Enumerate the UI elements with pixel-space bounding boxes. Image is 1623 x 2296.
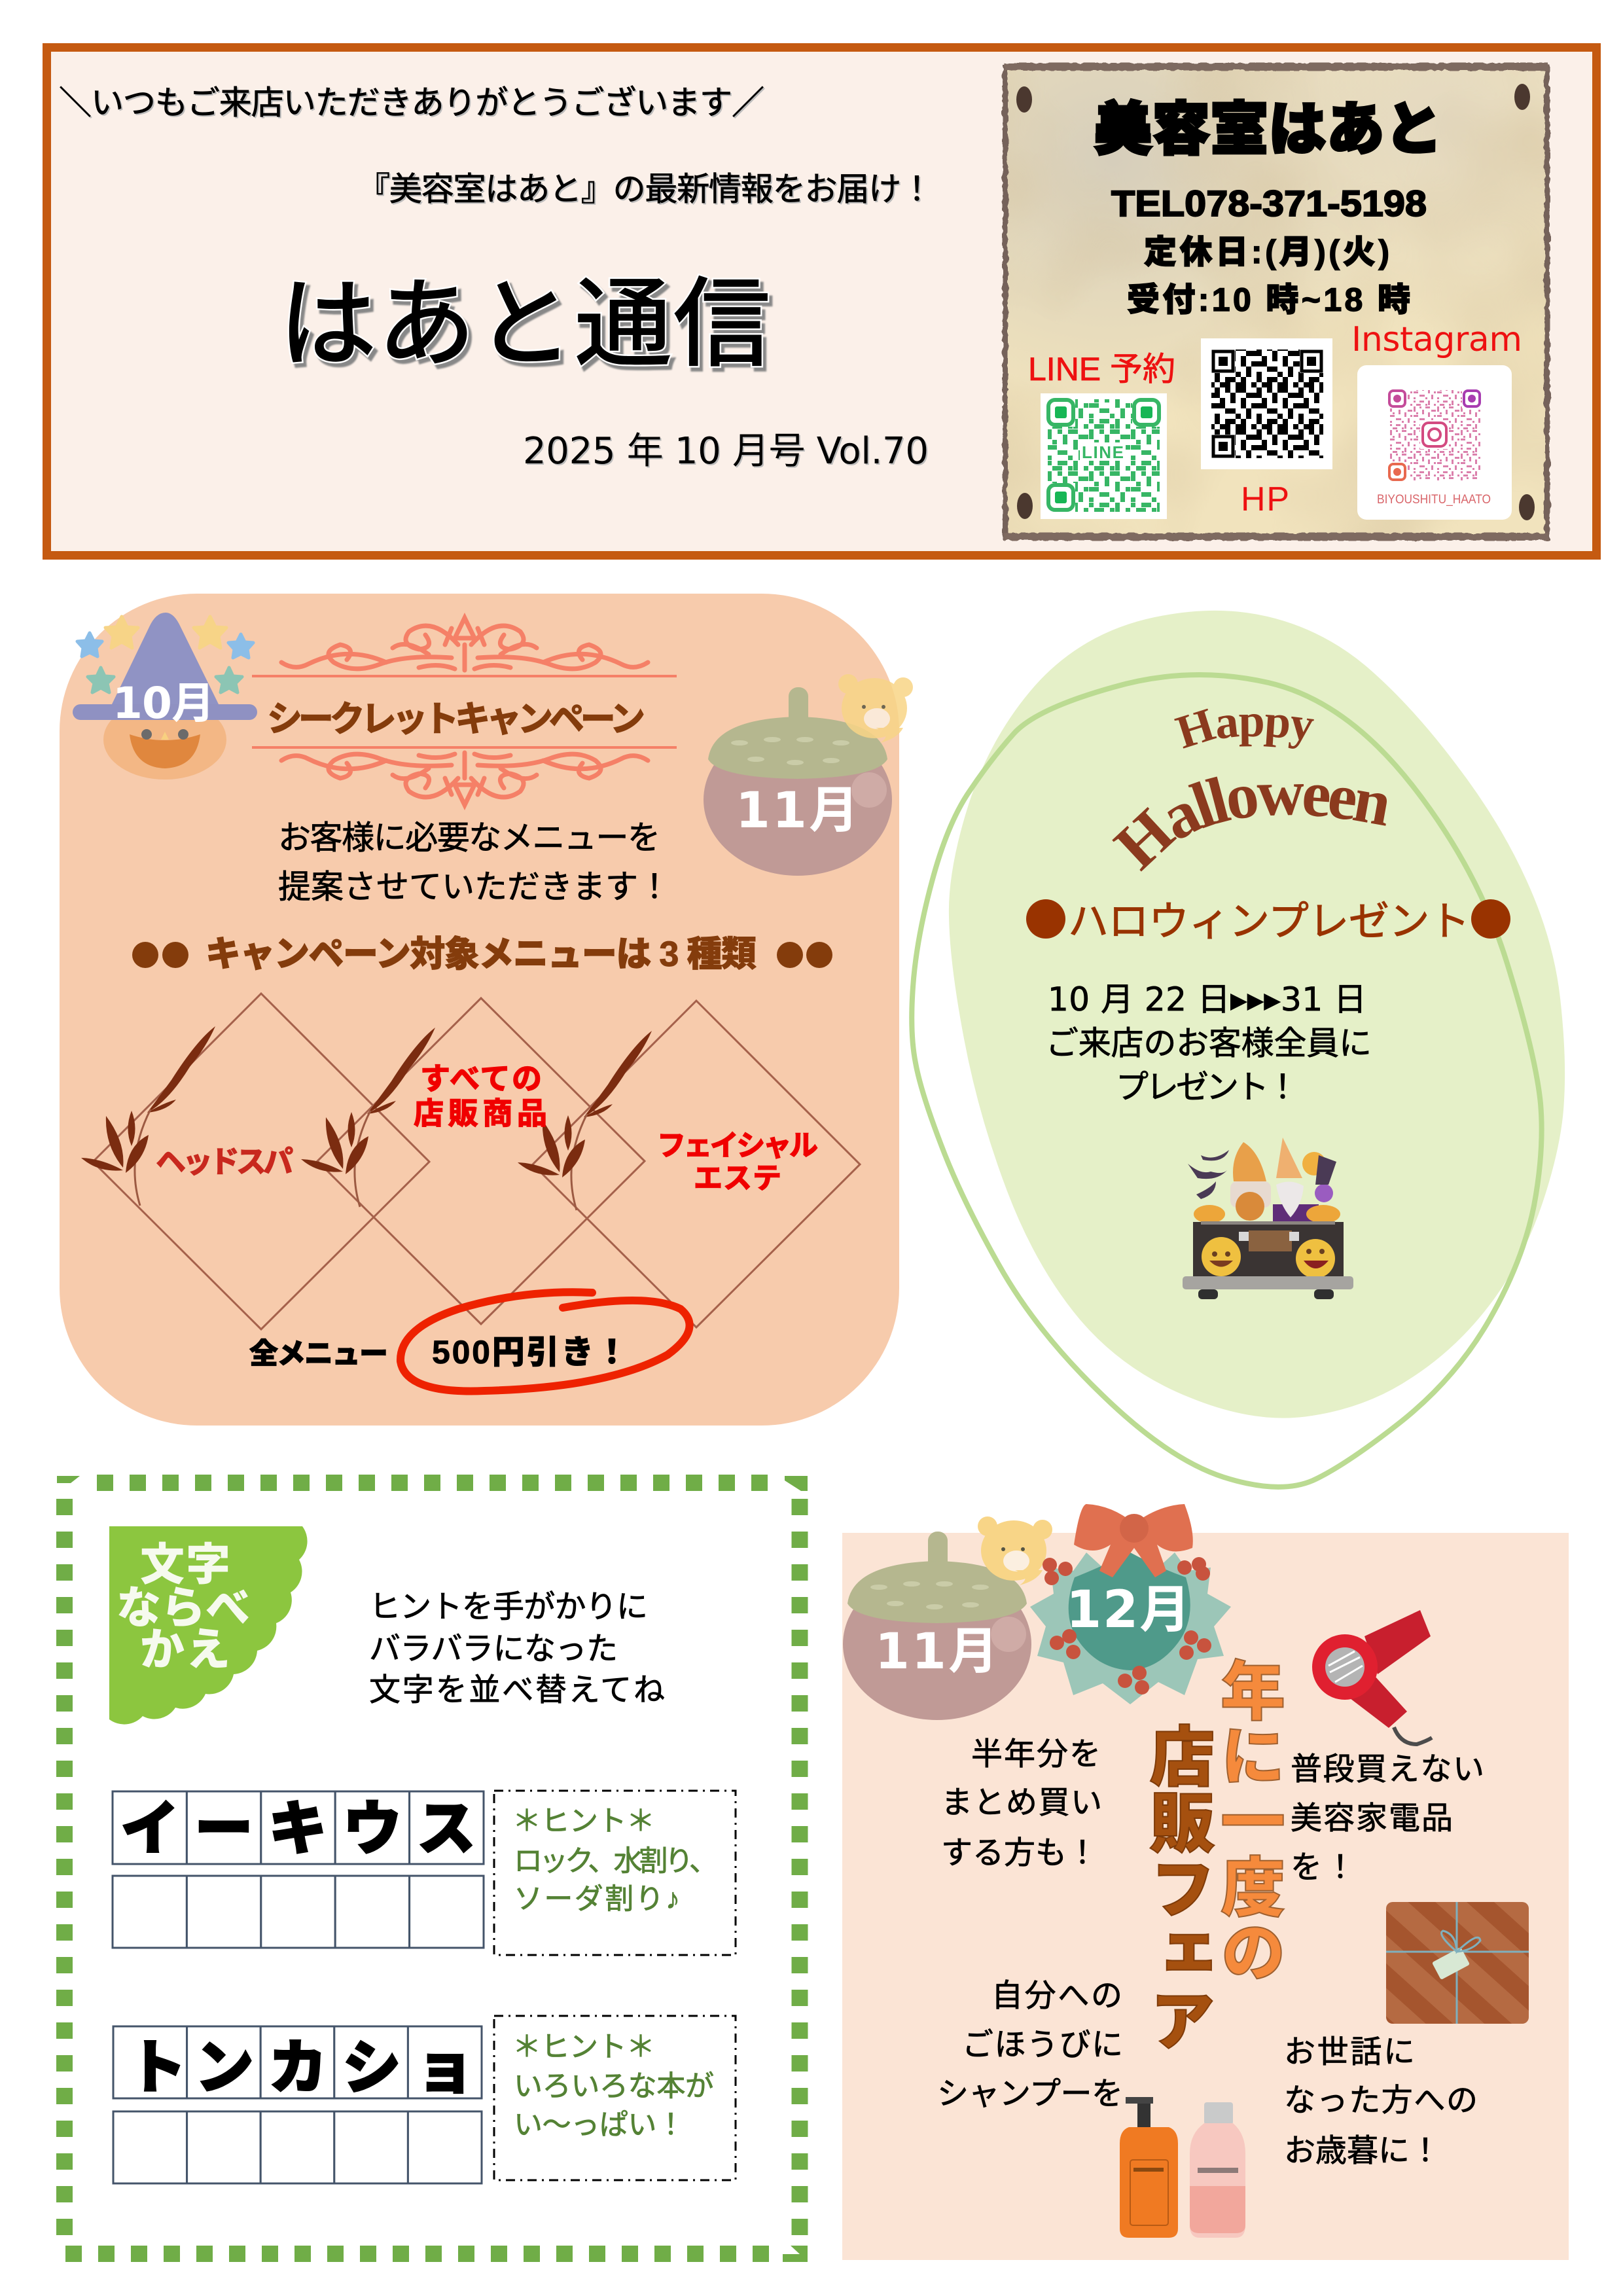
icon: christmas wreath december: 12月: [1066, 1581, 1190, 1640]
menu label: facial esthetics: フェイシャル: [657, 1130, 818, 1162]
icon: gift box: [1386, 1902, 1529, 2024]
icon: witch pumpkin october: [73, 613, 257, 780]
text: self reward: [937, 1979, 1123, 2111]
hint box 1: [494, 1791, 736, 1955]
text: beauty appliances: 普段買えない: [1291, 1752, 1484, 1787]
panel: word puzzle: [57, 1476, 808, 2262]
puzzle letters 1: ウ: [343, 1797, 402, 1862]
puzzle letters 2: ョ: [416, 2036, 474, 2101]
puzzle letters 1: [120, 1797, 476, 1862]
icon: shampoo bottles: [1120, 2097, 1245, 2238]
puzzle instructions: バラバラになった: [369, 1632, 618, 1666]
text: bulk buying: [941, 1737, 1102, 1871]
menu diamonds: [81, 994, 860, 1329]
text: year-end gifts: お世話に: [1284, 2035, 1415, 2070]
campaign description: [278, 819, 671, 905]
discount text: 500円引き！: [432, 1334, 628, 1371]
icon: acorn november: 11月: [736, 781, 859, 839]
icon: wheat branch 3: [518, 1031, 652, 1210]
halloween text: Halloween: [1112, 776, 1387, 872]
text: beauty appliances: を！: [1291, 1850, 1356, 1885]
puzzle letters 1: キ: [268, 1797, 327, 1862]
puzzle instructions: [369, 1590, 665, 1708]
dashed frame: [57, 1476, 808, 2262]
present description: 10 月 22 日▸▸▸31 日: [1048, 980, 1366, 1018]
puzzle letters 2: シ: [342, 2036, 401, 2101]
subtitle text: 『美容室はあと』の最新情報をお届け！: [357, 171, 933, 207]
issue date: 2025 年 10 月号 Vol.70: [523, 430, 929, 473]
Instagram QR code: [1357, 365, 1512, 520]
panel: shop info parchment: [1004, 63, 1548, 541]
hint box 2: [494, 2016, 736, 2180]
text: self reward: シャンプーを: [937, 2077, 1123, 2111]
icon: witch pumpkin october: 10月: [113, 678, 215, 728]
menu heading: キャンペーン対象メニューは 3 種類: [205, 935, 757, 974]
hint box 2: ＊ヒント＊: [512, 2031, 655, 2063]
text: self reward: 自分への: [991, 1979, 1122, 2013]
icon: acorn november: [843, 1532, 1031, 1720]
icon: hair dryer: [1312, 1610, 1432, 1744]
LINE label: LINE 予約: [1028, 351, 1175, 387]
Instagram QR code: BIYOUSHITU_HAATO: [1377, 493, 1491, 507]
puzzle instructions: 文字を並べ替えてね: [369, 1673, 665, 1708]
text: self reward: ごほうびに: [962, 2028, 1123, 2062]
panel: halloween present: [909, 610, 1565, 1490]
happy text: Happy: [1174, 708, 1314, 749]
greeting text: ＼いつもご来店いただきありがとうございます／: [59, 84, 764, 121]
puzzle letters 2: カ: [268, 2036, 327, 2101]
icon: scalloped puzzle badge: 文字: [140, 1540, 230, 1590]
HP label: HP: [1241, 480, 1289, 518]
ornament: lower flourish: [281, 753, 648, 805]
text: year-end gifts: お歳暮に！: [1284, 2134, 1441, 2168]
icon: bear: [838, 674, 913, 743]
icon: halloween truck: [1183, 1138, 1353, 1299]
newsletter title: はあと通信: [279, 269, 771, 379]
puzzle letters 2: ト: [128, 2036, 187, 2101]
LINE QR code: [1041, 393, 1167, 519]
puzzle letters 1: ー: [194, 1797, 253, 1862]
hint box 2: いろいろな本が: [514, 2070, 714, 2102]
text: year-end gifts: なった方への: [1284, 2083, 1478, 2118]
campaign description: 提案させていただきます！: [278, 869, 671, 905]
text: bulk buying: する方も！: [941, 1836, 1098, 1871]
opening hours: 受付:10 時~18 時: [1127, 281, 1410, 318]
text: bulk buying: 半年分を: [971, 1737, 1101, 1772]
closed days: 定休日:(月)(火): [1144, 234, 1389, 270]
icon: scalloped puzzle badge: かえ: [140, 1625, 230, 1675]
puzzle grid 2: [113, 2026, 482, 2183]
text: beauty appliances: 美容家電品: [1291, 1801, 1453, 1836]
text: year-end gifts: [1284, 2035, 1478, 2168]
menu label: retail products: [414, 1062, 547, 1130]
present description: ご来店のお客様全員に: [1046, 1025, 1372, 1062]
puzzle letters 2: ン: [195, 2036, 254, 2101]
campaign heading: シークレットキャンペーン: [267, 700, 645, 739]
hint box 2: い～っぱい！: [514, 2109, 685, 2141]
present heading: ハロウィンプレゼント: [1068, 899, 1470, 944]
icon: wheat branch 1: [81, 1026, 215, 1206]
puzzle grid 1: [113, 1791, 484, 1948]
bow: [1074, 1504, 1193, 1577]
discount circle: [401, 1292, 690, 1391]
puzzle letters 2: [128, 2036, 474, 2101]
phone number: TEL078-371-5198: [1111, 183, 1427, 224]
menu label: retail products: 店販商品: [414, 1096, 547, 1130]
shop name: 美容室はあと: [1094, 97, 1442, 162]
menu label: retail products: すべての: [420, 1062, 542, 1096]
icon: acorn november: [704, 687, 892, 876]
icon: scalloped puzzle badge: ならべ: [116, 1583, 250, 1633]
menu label: facial esthetics: [657, 1130, 818, 1194]
panel: year-end retail fair: [842, 1504, 1569, 2260]
fair title: retail fair: 店販フェア: [1139, 1723, 1214, 2053]
menu label: head spa: ヘッドスパ: [156, 1145, 293, 1179]
LINE QR code: LINE: [1082, 442, 1124, 462]
hint box 1: ソーダ割り♪: [514, 1883, 680, 1915]
HP QR code: [1201, 338, 1332, 469]
menu label: facial esthetics: エステ: [694, 1162, 781, 1194]
puzzle letters 1: ス: [417, 1797, 476, 1862]
present description: [1046, 980, 1372, 1105]
all menu label: 全メニュー: [249, 1338, 388, 1370]
hint box 1: ＊ヒント＊: [512, 1805, 655, 1837]
icon: wheat branch 2: [301, 1028, 435, 1207]
Instagram label: Instagram: [1351, 320, 1522, 359]
icon: scalloped puzzle badge: [109, 1526, 308, 1725]
icon: bear: [978, 1516, 1052, 1585]
fair title: once a year: 年に一度の: [1211, 1657, 1285, 1984]
header panel: [47, 47, 1597, 555]
text: bulk buying: まとめ買い: [941, 1785, 1102, 1820]
puzzle letters 1: イ: [120, 1797, 179, 1862]
icon: acorn november: 11月: [875, 1622, 998, 1680]
ornament: upper flourish: [281, 618, 648, 670]
present description: プレゼント！: [1116, 1069, 1299, 1105]
text: beauty appliances: [1291, 1752, 1484, 1885]
icon: christmas wreath december: [1030, 1504, 1231, 1704]
puzzle instructions: ヒントを手がかりに: [369, 1590, 648, 1624]
panel: secret campaign: [60, 594, 913, 1426]
hint box 1: ロック、水割り、: [514, 1845, 718, 1877]
campaign description: お客様に必要なメニューを: [278, 819, 660, 856]
